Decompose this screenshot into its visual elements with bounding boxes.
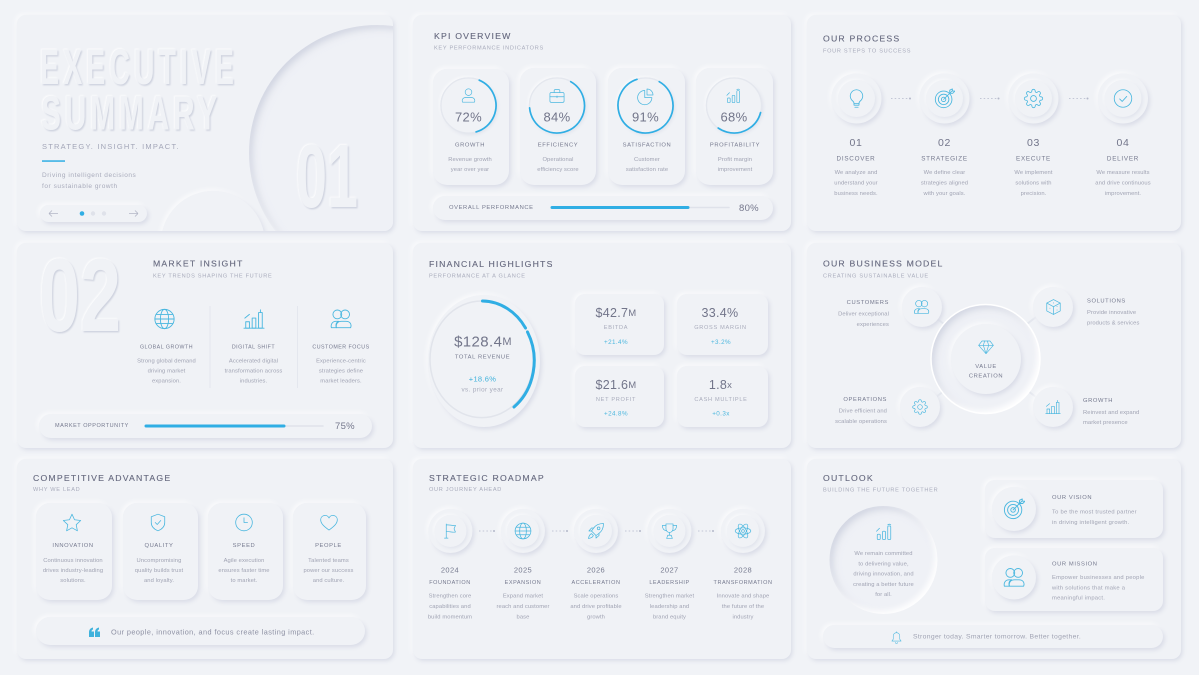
commitment circle [830,506,938,614]
milestone 2028: 2028 [734,566,752,574]
step: discover: We analyze and [835,170,877,176]
card: profitability: improvement [718,167,753,173]
subheading: WHY WE LEAD [33,487,80,493]
step: strategize: 02 [938,137,951,149]
milestone 2024: capabilities and [429,604,471,610]
market opportunity bar [39,414,372,438]
insight: digital shift: Accelerated digital [229,358,278,364]
node: solutions: products & services [1087,320,1139,326]
card: growth: 72% [455,110,482,124]
panel: outlook [807,459,1181,659]
metric: gross margin: +3.2% [711,339,731,346]
milestone 2027 [645,509,694,620]
heading: OUTLOOK [823,473,874,483]
card: people: and culture. [313,578,345,584]
insight: customer focus: CUSTOMER FOCUS [312,344,370,350]
metric: cash multiple [677,366,768,427]
tagline: STRATEGY. INSIGHT. IMPACT. [42,142,180,151]
metric: ebitda: $42.7M [596,306,636,320]
metric: cash multiple: +0.3x [712,410,730,418]
connectors [936,317,1036,397]
card: efficiency: efficiency score [537,167,579,173]
milestone 2026: ACCELERATION [572,580,620,586]
card: people: PEOPLE [315,543,342,549]
raised circle decoration [257,215,265,231]
panel: kpi overview [413,15,791,231]
card: our mission: Empower businesses and people [1052,575,1145,581]
quote pill: Our people, innovation, and focus create lasting impact. [111,628,315,636]
card: our vision: To be the most trusted partner [1052,510,1137,516]
node: growth [1033,387,1139,427]
step: execute: solutions with [1015,180,1052,186]
arrow 3 [625,530,641,532]
total revenue gauge: vs. prior year [462,386,504,394]
card: growth: Revenue growth [448,157,492,163]
insight: customer focus: market leaders. [320,378,362,384]
card: our vision: OUR VISION [1052,495,1092,501]
insight: customer focus: strategies define [319,368,363,374]
insight: digital shift [225,310,282,384]
commitment circle: for all. [875,592,892,598]
milestone 2026: growth [587,614,605,620]
card: speed: SPEED [233,543,255,549]
arrow 1 [479,530,495,532]
card: our vision [985,480,1163,538]
milestone 2025: EXPANSION [505,580,541,586]
node: growth: Reinvest and expand [1083,410,1139,416]
metric: cash multiple: CASH MULTIPLE [694,397,748,403]
metric: net profit: NET PROFIT [596,397,636,403]
step: strategize [920,74,970,197]
arrow 4 [698,530,714,532]
card: quality: quality builds trust [135,568,183,574]
node: operations: Drive efficient and [839,408,887,414]
value creation hub: VALUE [975,364,997,370]
value creation hub [931,304,1040,414]
panel: market insight [17,238,393,448]
node: customers [838,287,942,328]
title: executive: EXECUTIVE [40,39,238,95]
step: execute [1008,74,1058,197]
insight: digital shift: transformation across [225,368,282,374]
card: innovation: drives industry-leading [43,568,103,574]
card: profitability: Profit margin [718,157,752,163]
heading: FINANCIAL HIGHLIGHTS [429,259,554,269]
milestone 2027: Strengthen market [645,594,694,600]
milestone 2028: Innovate and shape [717,594,769,600]
description: for sustainable growth [42,183,118,190]
milestone 2026: Scale operations [574,594,618,600]
card: growth: year over year [451,167,489,173]
insight: digital shift: DIGITAL SHIFT [232,344,275,350]
card: speed [208,503,283,600]
node: operations: scalable operations [835,419,887,425]
insight: global growth: Strong global demand [137,358,196,364]
description: Driving intelligent decisions [42,172,137,179]
metric: net profit [575,366,664,427]
description [42,172,137,190]
insight: global growth: driving market [148,368,186,374]
step: execute: We implement [1014,170,1053,176]
overall performance bar: OVERALL PERFORMANCE [449,205,534,211]
card: our mission [985,548,1163,611]
number 01: 01 [296,127,358,227]
card: growth [432,69,509,185]
milestone 2027: leadership and [650,604,689,610]
milestone 2025: 2025 [514,566,532,574]
milestone 2028: industry [732,614,754,620]
insight: digital shift: industries. [240,378,268,384]
card: satisfaction [608,68,685,185]
metric: gross margin: 33.4% [702,306,738,320]
step: deliver: We measure results [1096,170,1150,176]
step: discover: 01 [850,137,862,149]
subheading: FOUR STEPS TO SUCCESS [823,48,911,54]
number 02: 02 [39,238,121,354]
milestone 2026: 2026 [587,566,605,574]
card: our mission: meaningful impact. [1052,596,1105,602]
panel: our process [807,15,1181,231]
heading: KPI OVERVIEW [434,31,511,41]
step: deliver: DELIVER [1107,156,1139,162]
panel: executive summary [20,20,396,234]
milestone 2024: 2024 [441,566,459,574]
step: discover: understand your [834,180,878,186]
arrow 3 [1069,98,1088,100]
subheading: CREATING SUSTAINABLE VALUE [823,274,929,280]
milestone 2028: the future of the [722,604,764,610]
commitment circle: creating a better future [853,582,914,588]
node: operations: OPERATIONS [843,397,887,403]
milestone 2025: base [517,614,529,620]
milestone 2027: brand equity [653,614,686,620]
subheading: BUILDING THE FUTURE TOGETHER [823,488,938,494]
milestone 2024: FOUNDATION [429,580,471,586]
step: deliver: and drive continuous [1095,180,1151,186]
milestone 2026: and drive profitable [570,604,622,610]
metric: ebitda: EBITDA [604,325,628,331]
card: innovation: solutions. [60,578,86,584]
commitment circle: to delivering value, [858,562,909,568]
card: people: power our success [303,568,354,574]
step: execute: precision. [1021,191,1047,197]
card: quality [123,503,198,600]
milestone 2025 [496,509,550,620]
card: profitability [696,68,773,185]
subheading: KEY PERFORMANCE INDICATORS [434,46,544,52]
metric: gross margin: GROSS MARGIN [694,325,747,331]
card: people [293,503,366,600]
card: speed: ensures faster time [218,568,270,574]
metric: net profit: $21.6M [596,378,636,392]
card: innovation [36,503,112,600]
node: operations [835,387,940,427]
heading: OUR PROCESS [823,34,900,44]
closing message pill: Stronger today. Smarter tomorrow. Better together. [913,634,1081,640]
milestone 2028: TRANSFORMATION [714,580,772,586]
heading: OUR BUSINESS MODEL [823,258,944,268]
step: strategize: STRATEGIZE [921,156,968,162]
milestone 2027: LEADERSHIP [649,580,690,586]
value creation hub: CREATION [969,374,1003,380]
card: satisfaction: SATISFACTION [623,142,671,148]
overall performance bar [433,196,773,220]
metric: cash multiple: 1.8x [709,378,732,392]
arrow 1 [891,98,911,100]
milestone 2027: 2027 [660,566,679,574]
arrow 2 [980,98,1000,100]
node: solutions: SOLUTIONS [1087,298,1126,304]
milestone 2024: Strengthen core [429,594,471,600]
card: quality: Uncompromising [137,558,181,564]
milestone 2025: reach and customer [496,604,550,610]
card: our vision: in driving intelligent growth. [1052,520,1130,526]
milestone 2024 [428,509,472,620]
milestone 2028 [714,509,772,620]
node: growth: GROWTH [1083,398,1113,404]
node: solutions [1033,287,1139,327]
total revenue gauge: +18.6% [469,374,496,384]
subheading: KEY TRENDS SHAPING THE FUTURE [153,274,272,280]
commitment circle: driving innovation, and [853,572,914,578]
card: speed: Agile execution [224,558,264,564]
card: our mission: OUR MISSION [1052,562,1098,568]
insight: global growth [137,309,196,384]
card: profitability: 68% [721,110,748,124]
inset circle decoration [249,25,393,226]
card: satisfaction: 91% [632,110,659,124]
panel: strategic roadmap [413,459,791,659]
step: strategize: We define clear [924,170,965,176]
step: deliver: 04 [1117,137,1129,149]
card: people: Talented teams [308,558,349,564]
milestone 2025: Expand market [503,594,543,600]
card: satisfaction: satisfaction rate [626,167,668,173]
navigation pill [40,205,147,222]
node: customers: Deliver exceptional [838,312,889,318]
insight: customer focus: Experience-centric [316,358,366,364]
step: discover: DISCOVER [837,156,875,162]
closing message pill [823,625,1163,648]
card: profitability: PROFITABILITY [710,142,760,148]
accent line [42,160,65,162]
subheading: PERFORMANCE AT A GLANCE [429,274,526,280]
overall performance bar: 80% [739,203,759,214]
card: efficiency [519,68,596,185]
step: discover: business needs. [834,191,878,197]
card: satisfaction: Customer [634,157,660,163]
metric: net profit: +24.8% [604,410,628,418]
commitment circle: We remain committed [854,551,913,557]
node: solutions: Provide innovative [1087,310,1136,316]
card: growth: GROWTH [455,142,485,148]
card: innovation: INNOVATION [52,543,94,549]
market opportunity bar: MARKET OPPORTUNITY [55,423,129,429]
arrow 2 [552,530,568,532]
metric: gross margin [677,294,768,355]
node: customers: experiences [857,322,889,328]
card: efficiency: Operational [542,157,574,163]
insight: global growth: GLOBAL GROWTH [140,344,193,350]
subheading: OUR JOURNEY AHEAD [429,487,502,493]
step: execute: 03 [1027,137,1040,149]
market opportunity bar: 75% [335,421,355,432]
card: innovation: Continuous innovation [43,558,103,564]
node: growth: market presence [1083,420,1128,426]
heading: STRATEGIC ROADMAP [429,473,545,483]
card: quality: and loyalty. [144,578,174,584]
step: deliver: improvement. [1105,191,1141,197]
step: strategize: with your goals. [923,191,966,197]
title: summary: SUMMARY [41,88,221,140]
heading: MARKET INSIGHT [153,258,244,268]
step: execute: EXECUTE [1016,156,1051,162]
total revenue gauge [428,295,540,427]
total revenue gauge: TOTAL REVENUE [455,354,510,360]
milestone 2026 [570,509,622,620]
panel: competitive advantage [17,459,393,659]
quote pill [36,617,365,645]
card: quality: QUALITY [144,543,174,549]
metric: ebitda: +21.4% [604,339,628,346]
milestone 2024: build momentum [428,614,472,620]
panel: business model [807,243,1181,448]
card: our mission: with solutions that make a [1051,586,1126,592]
node: customers: CUSTOMERS [847,300,889,306]
insight: customer focus [312,310,370,384]
metric: ebitda [575,294,664,355]
card: speed: to market. [231,578,258,584]
card: efficiency: EFFICIENCY [538,142,578,148]
step: deliver [1095,74,1151,197]
step: strategize: strategies aligned [921,180,968,186]
panel: financial highlights [413,243,791,448]
step: discover [832,74,882,197]
card: efficiency: 84% [544,110,571,124]
heading: COMPETITIVE ADVANTAGE [33,473,171,483]
total revenue gauge: $128.4M [454,334,512,350]
insight: global growth: expansion. [152,378,181,384]
